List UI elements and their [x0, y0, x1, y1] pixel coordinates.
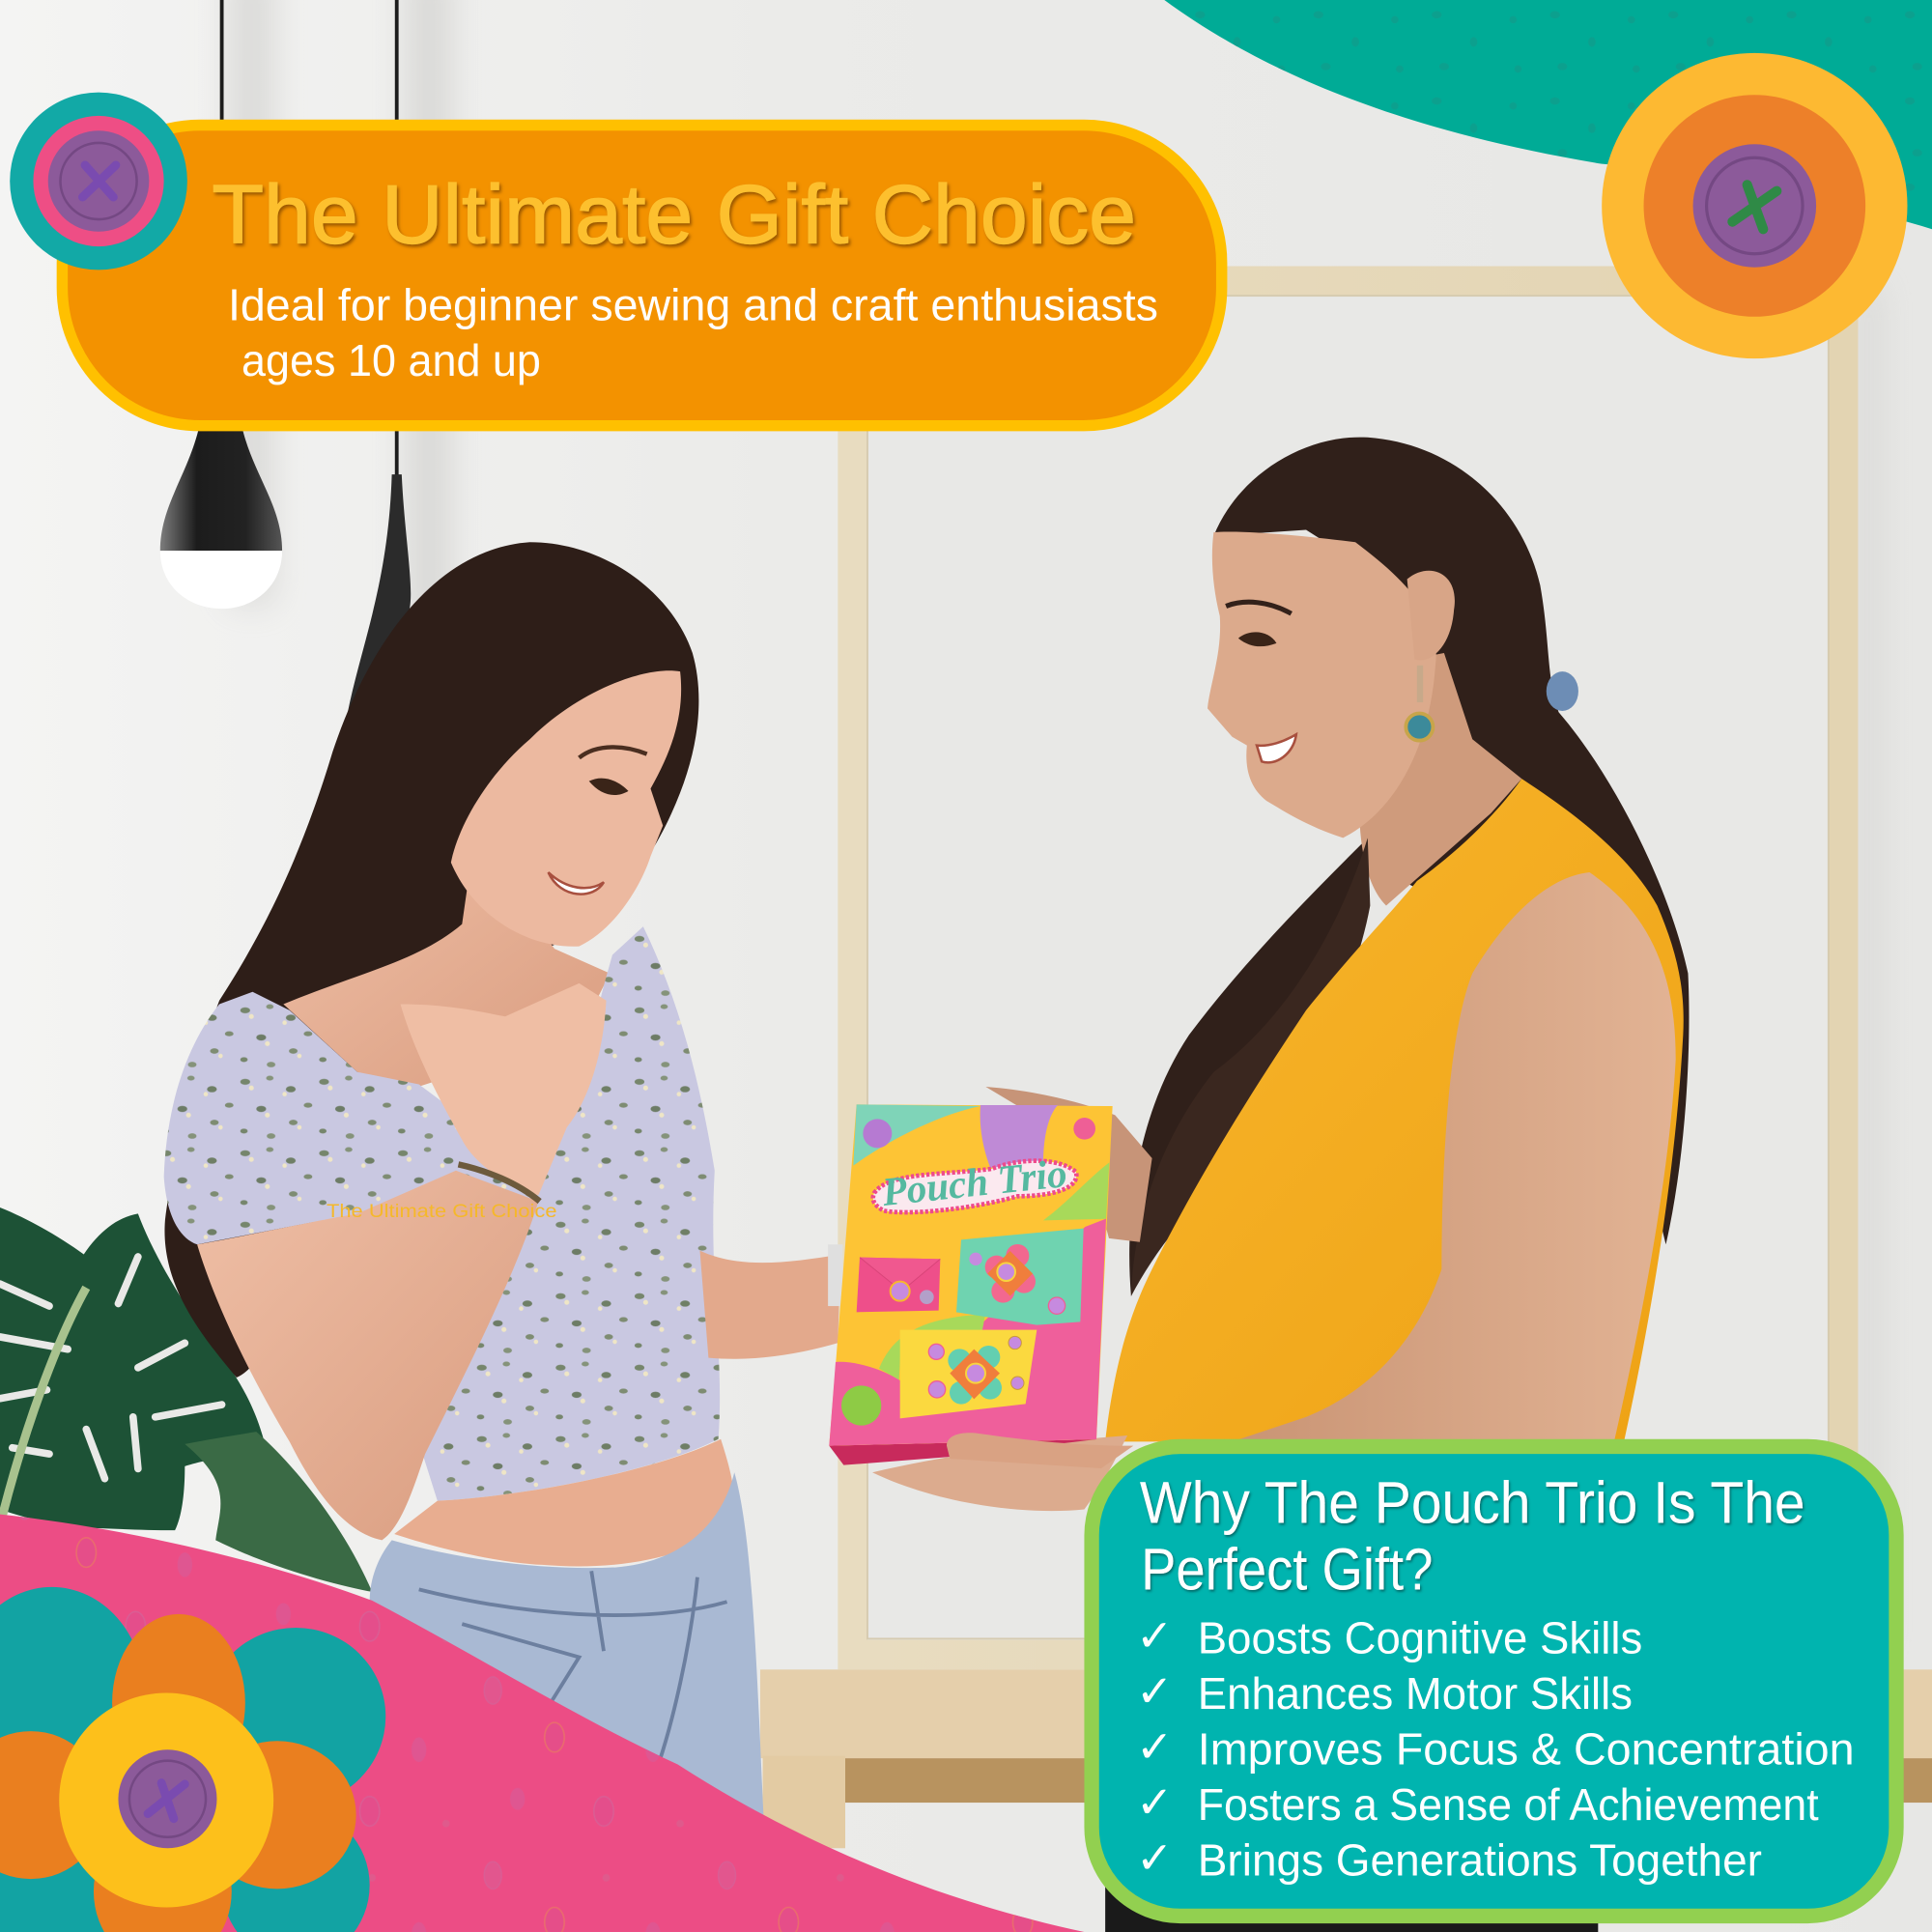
plant: [0, 1208, 372, 1592]
pendant lamp cords: [220, 0, 399, 493]
woman bare arm: [1233, 872, 1676, 1441]
age seal: [1073, 1118, 1095, 1140]
green seal: [841, 1385, 881, 1426]
teal wave dot texture: [1164, 0, 1932, 229]
thumb on the box: [947, 1433, 1133, 1468]
woman trousers: [1105, 1886, 1598, 1932]
girl arm and hand: [197, 1171, 538, 1540]
girl face: [451, 670, 681, 947]
benefit: cognitive skills: ✓: [1136, 1609, 1173, 1662]
pink pouch: [857, 1258, 940, 1312]
panel heading line two: Perfect Gift?: [1141, 1536, 1433, 1602]
woman facial features: [1226, 602, 1296, 762]
woman face: [1208, 531, 1436, 838]
teal corner: [853, 1104, 980, 1166]
box bottom flap: [829, 1439, 1096, 1465]
woman hair tie: [1547, 671, 1578, 711]
girl facial features: [549, 747, 647, 895]
wall shadows behind the lamps and frame: [229, 0, 1878, 1651]
person: girl: [164, 542, 840, 1824]
pink lower area: [829, 1219, 1106, 1446]
pendant lamp: slim: [345, 474, 411, 727]
purple top band: [980, 1105, 1058, 1168]
benefit: focus: Improves Focus & Concentration: [1198, 1724, 1855, 1775]
girl midriff: [394, 1439, 735, 1566]
benefit: focus: ✓: [1136, 1720, 1173, 1773]
woman hair lock over the neck: [1131, 838, 1370, 1296]
product box: Pouch Trio: [829, 1104, 1133, 1468]
button decoration: title: [10, 93, 187, 270]
jeans pocket seams: [419, 1571, 727, 1762]
woman hair and ponytail: [1129, 438, 1690, 1296]
girl other arm: [699, 1251, 840, 1359]
green mid band: [879, 1315, 985, 1379]
stray caption on the shirt: The Ultimate Gift Choice: [327, 1202, 557, 1222]
girl jeans: [370, 1472, 764, 1824]
girl neck and chest: [283, 838, 610, 1091]
panel: why the pouch trio: [1092, 1446, 1896, 1916]
woman dress: [1105, 779, 1684, 1441]
green band: [1043, 1162, 1109, 1220]
watch on the girl's wrist behind the box: [828, 1244, 842, 1306]
woman ear and earring: [1406, 571, 1455, 741]
girl hand on chest: [401, 983, 607, 1195]
panel heading line one: Why The Pouch Trio Is The: [1140, 1470, 1805, 1536]
pendant lamp: round: [160, 425, 282, 609]
girl floral top: [164, 926, 720, 1501]
top-right teal wave: [1164, 0, 1932, 229]
benefit: cognitive skills: Boosts Cognitive Skills: [1198, 1613, 1642, 1663]
picture frame on the wall: [853, 281, 1843, 1655]
benefit: achievement: ✓: [1136, 1776, 1173, 1828]
bottom-left pink wave: [0, 1515, 1084, 1932]
benefit: generations: Brings Generations Together: [1198, 1834, 1762, 1885]
title heading: The Ultimate Gift Choice: [212, 167, 1136, 261]
box title: Pouch Trio: [879, 1151, 1069, 1215]
box base: [829, 1104, 1113, 1446]
subtitle line two: ages 10 and up: [242, 335, 541, 385]
benefit: generations: ✓: [1136, 1832, 1173, 1884]
wooden table: [760, 1669, 1932, 1848]
benefit: motor skills: Enhances Motor Skills: [1198, 1668, 1633, 1719]
girl bracelet: [458, 1164, 540, 1202]
woman near hand under the box: [872, 1435, 1127, 1511]
teal pouch: [956, 1229, 1084, 1325]
woman neck: [1359, 653, 1521, 905]
logo plate: [873, 1161, 1076, 1212]
flower decoration: [0, 1587, 385, 1932]
badge: [863, 1119, 892, 1148]
title pill: [62, 125, 1222, 426]
benefit: motor skills: ✓: [1136, 1665, 1173, 1718]
person: woman: [872, 438, 1690, 1932]
yellow pouch: [900, 1330, 1037, 1418]
button decoration: top right: [1602, 53, 1907, 358]
pink wave dot texture: [0, 1515, 1084, 1932]
benefit: achievement: Fosters a Sense of Achievement: [1198, 1779, 1819, 1830]
subtitle line one: Ideal for beginner sewing and craft enthusiasts: [228, 280, 1158, 330]
girl hair: [164, 542, 698, 1378]
woman far hand behind the box: [985, 1087, 1152, 1242]
